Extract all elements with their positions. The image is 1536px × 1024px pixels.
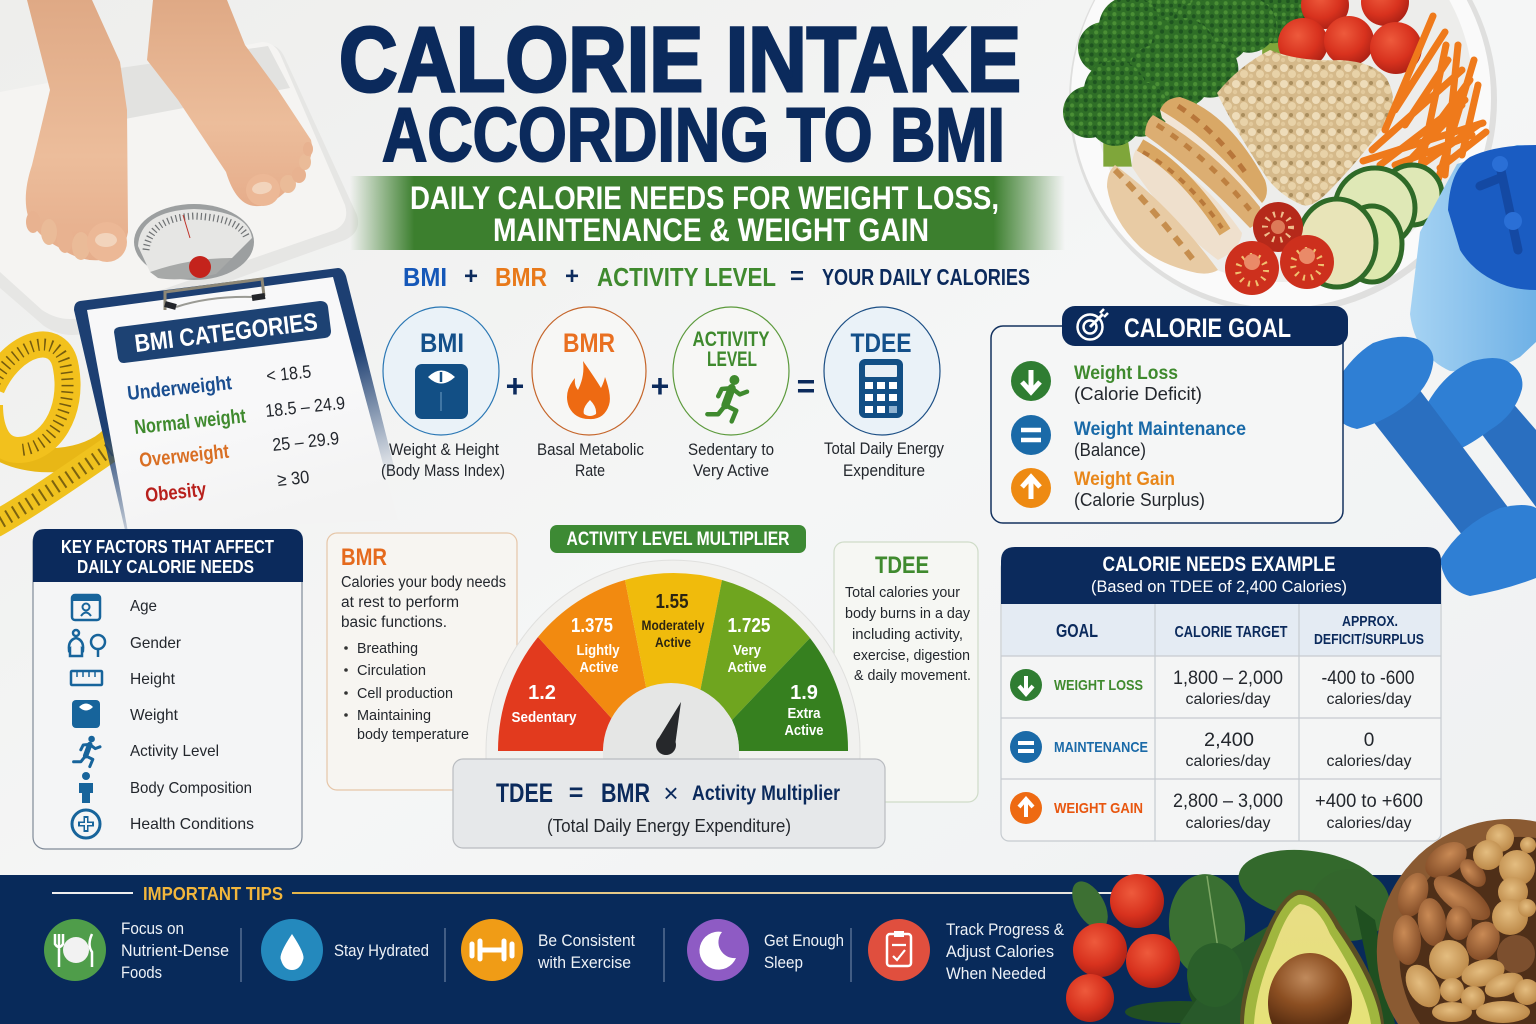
table: calorie needs example	[1001, 547, 1441, 841]
front dumbbell	[1327, 337, 1536, 596]
segment: lightly active: Active	[580, 659, 618, 676]
icon: calculator	[859, 359, 903, 418]
heading: KEY FACTORS THAT AFFECT	[61, 537, 274, 557]
segment: very active: Active	[728, 659, 766, 676]
row: weight gain: WEIGHT GAIN	[1054, 800, 1143, 817]
segment: moderately active: 1.55	[656, 591, 688, 613]
goal: weight loss: (Calorie Deficit)	[1074, 383, 1202, 404]
segment: lightly active: Lightly	[576, 642, 620, 659]
BMI rows: Normal weight	[133, 405, 247, 439]
goal: gain: (Calorie Surplus)	[1074, 489, 1205, 510]
left foot	[26, 0, 128, 262]
spinach leaves	[1065, 841, 1395, 1024]
segment: extra active: Active	[784, 722, 824, 739]
scale dial	[134, 204, 254, 280]
title: ACCORDING TO BMI	[382, 93, 1005, 178]
circle: BMR	[532, 307, 646, 435]
nut bowl	[1377, 819, 1536, 1024]
tip: sleep: Sleep	[764, 953, 803, 972]
captions under circles: Expenditure	[843, 462, 925, 480]
tip: hydration: Stay Hydrated	[334, 941, 429, 960]
formula line: YOUR DAILY CALORIES	[822, 264, 1030, 290]
tip: nutrient-dense foods: Nutrient-Dense	[121, 941, 229, 960]
broccoli	[1063, 0, 1322, 167]
goal: maintenance: Weight Maintenance	[1074, 419, 1246, 440]
factor: health conditions: Health Conditions	[130, 816, 254, 833]
panel: TDEE explanation: exercise, digestion	[853, 647, 970, 664]
factor: age	[72, 595, 157, 620]
segment: moderately active: Active	[655, 634, 691, 650]
column headers: GOAL	[1056, 621, 1098, 641]
tip: track progress: When Needed	[946, 964, 1046, 983]
panel: TDEE explanation: body burns in a day	[845, 605, 970, 622]
tip: exercise	[461, 919, 635, 981]
factor: weight: Weight	[130, 707, 179, 724]
factor: activity level: Activity Level	[130, 743, 219, 760]
plus sign: +	[651, 368, 669, 404]
title	[339, 9, 1021, 178]
rear dumbbell	[1427, 358, 1536, 507]
circle: BMR: BMR	[563, 328, 615, 358]
formula box: ×	[663, 778, 679, 808]
row: weight loss: calories/day	[1326, 691, 1412, 708]
formula line	[403, 262, 1030, 292]
panel: TDEE explanation: & daily movement.	[854, 667, 971, 684]
heading text: BMI CATEGORIES	[133, 308, 319, 358]
row: maintenance: calories/day	[1326, 753, 1412, 770]
photo: tomatoes spinach avocado	[1065, 819, 1536, 1024]
segment: moderately active: Moderately	[642, 617, 705, 633]
captions under circles: Very Active	[693, 462, 769, 480]
photo: yellow measuring tape	[0, 345, 112, 525]
title: CALORIE INTAKE	[339, 9, 1021, 111]
bullet list: body temperature	[357, 726, 469, 743]
subtitle banner: DAILY CALORIE NEEDS FOR WEIGHT LOSS,	[410, 180, 999, 216]
formula line: =	[790, 263, 804, 290]
formula box	[453, 759, 885, 848]
segment: moderately active	[625, 573, 722, 692]
BMI rows: Obesity	[144, 479, 208, 507]
segment: lightly active	[538, 580, 647, 720]
table heading	[1001, 547, 1441, 604]
segment: sedentary: 1.2	[528, 682, 556, 704]
icon: scale	[415, 364, 468, 419]
column headers: CALORIE TARGET	[1174, 624, 1288, 641]
captions under circles: Basal Metabolic	[537, 441, 644, 459]
table heading: (Based on TDEE of 2,400 Calories)	[1091, 577, 1347, 596]
subtitle banner: MAINTENANCE & WEIGHT GAIN	[493, 212, 929, 248]
tomatoes	[1066, 874, 1180, 1022]
captions under circles: Rate	[575, 462, 605, 480]
gauge needle	[656, 702, 681, 755]
photo: food bowl	[1063, 0, 1497, 314]
goal: gain: Weight Gain	[1074, 469, 1175, 490]
tip: sleep: Get Enough	[764, 931, 844, 950]
tip: exercise: with Exercise	[537, 953, 631, 972]
formula box: Activity Multiplier	[692, 781, 841, 805]
segment: very active	[700, 580, 810, 720]
row: weight loss: -400 to -600	[1322, 668, 1414, 689]
factor: gender	[69, 630, 182, 657]
circle: BMI: BMI	[420, 328, 464, 358]
captions under circles: Sedentary to	[688, 441, 774, 459]
formula box: TDEE	[496, 778, 553, 808]
halved cherry tomatoes	[1225, 202, 1334, 295]
formula box: BMR	[601, 778, 650, 808]
equals sign: =	[797, 368, 815, 404]
row: weight gain: calories/day	[1186, 815, 1270, 832]
circle: activity level: LEVEL	[707, 348, 757, 371]
clipboard metal clip	[165, 279, 265, 310]
circle: BMI	[383, 307, 499, 435]
column headers	[1002, 604, 1440, 656]
panel: TDEE explanation: TDEE	[875, 552, 929, 579]
quinoa	[1217, 50, 1393, 206]
goal: weight loss: Weight Loss	[1074, 363, 1178, 384]
tips heading: IMPORTANT TIPS	[143, 884, 283, 904]
bullet list: Cell production	[357, 685, 453, 702]
segment: lightly active: 1.375	[571, 615, 613, 637]
carrot strips	[1363, 16, 1486, 190]
gauge: activity level multiplier	[486, 525, 860, 770]
table heading: CALORIE NEEDS EXAMPLE	[1102, 553, 1336, 576]
formula line: +	[565, 263, 579, 290]
segment: extra active: Extra	[788, 705, 821, 722]
formula line: BMI	[403, 262, 447, 292]
tip: track progress: Track Progress &	[946, 920, 1065, 939]
goal: maintenance	[1011, 415, 1246, 460]
bullet list	[344, 640, 469, 743]
BMI rows: Underweight	[126, 372, 233, 405]
row: maintenance: calories/day	[1186, 753, 1270, 770]
column headers: APPROX.	[1342, 613, 1398, 630]
BMI rows	[126, 361, 346, 507]
panel: BMR explanation	[327, 533, 517, 790]
avocado	[1240, 890, 1384, 1024]
captions under circles	[381, 440, 945, 480]
factor: gender: Gender	[130, 635, 182, 652]
panel: BMR explanation: Calories your body needs	[341, 574, 506, 591]
segment: very active: 1.725	[728, 615, 770, 637]
goal: gain	[1011, 468, 1205, 510]
icon: runner	[707, 375, 747, 421]
factor: body composition	[79, 772, 252, 803]
captions under circles: Total Daily Energy	[824, 440, 945, 458]
formula line: BMR	[495, 262, 547, 292]
tip: sleep	[687, 919, 844, 981]
tip: track progress	[868, 919, 1065, 983]
tip: nutrient-dense foods: Focus on	[121, 919, 184, 938]
BMI rows: 18.5 – 24.9	[264, 393, 346, 421]
bullet list: Breathing	[357, 640, 418, 657]
heading bar	[114, 301, 331, 363]
heading: DAILY CALORIE NEEDS	[77, 557, 254, 577]
row: weight loss: WEIGHT LOSS	[1054, 677, 1143, 694]
segment: extra active	[732, 638, 848, 751]
BMI rows: < 18.5	[265, 361, 312, 386]
panel: TDEE explanation	[834, 542, 978, 802]
factor: health conditions	[72, 810, 254, 838]
gauge hub	[603, 683, 739, 762]
bullet list: Circulation	[357, 662, 426, 679]
right foot	[147, 0, 313, 206]
panel: TDEE explanation: including activity,	[852, 626, 963, 643]
captions under circles: Weight & Height	[389, 441, 499, 459]
goal: weight loss	[1011, 361, 1202, 404]
avocado pit	[1268, 953, 1352, 1024]
row: weight gain: 2,800 – 3,000	[1173, 791, 1283, 812]
circle: TDEE	[824, 307, 940, 435]
formula line: ACTIVITY LEVEL	[597, 262, 776, 292]
gauge heading: ACTIVITY LEVEL MULTIPLIER	[566, 529, 790, 550]
subtitle banner	[350, 176, 1065, 250]
tip: nutrient-dense foods: Foods	[121, 963, 162, 982]
panel: TDEE explanation: Total calories your	[845, 584, 960, 601]
gauge heading	[550, 525, 806, 553]
goal: maintenance: (Balance)	[1074, 439, 1146, 460]
tip: track progress: Adjust Calories	[946, 942, 1054, 961]
segment: sedentary	[498, 637, 613, 751]
tip: hydration	[261, 919, 429, 981]
row: maintenance	[1010, 730, 1412, 770]
factor: body composition: Body Composition	[130, 780, 252, 797]
panel: BMR explanation: BMR	[341, 544, 387, 571]
factor: weight	[72, 700, 179, 728]
tomatoes	[1278, 0, 1422, 74]
segment: sedentary: Sedentary	[512, 709, 577, 726]
row: weight gain: +400 to +600	[1315, 791, 1423, 812]
formula box: =	[569, 779, 583, 807]
icon: target	[1078, 309, 1108, 340]
circle: activity level: ACTIVITY	[692, 328, 770, 351]
circle: TDEE: TDEE	[850, 328, 912, 358]
formula box: (Total Daily Energy Expenditure)	[547, 816, 791, 836]
row: weight loss	[1010, 668, 1414, 708]
formula line: +	[464, 263, 478, 290]
segment: very active: Very	[733, 642, 762, 659]
factor: height: Height	[130, 671, 176, 688]
photo: feet on bathroom scale	[0, 0, 358, 335]
photo: blue water bottle	[1410, 145, 1536, 372]
gauge outer ring	[486, 560, 860, 770]
segment: extra active: 1.9	[790, 682, 818, 704]
row: maintenance: MAINTENANCE	[1054, 739, 1148, 756]
panel: calorie goal	[991, 306, 1348, 523]
BMI rows: ≥ 30	[276, 467, 310, 490]
captions under circles: (Body Mass Index)	[381, 462, 505, 480]
clipboard: BMI categories	[74, 268, 405, 532]
bullet list: Maintaining	[357, 707, 431, 724]
row: maintenance: 2,400	[1204, 730, 1254, 751]
BMI rows: Overweight	[138, 441, 230, 472]
row: weight gain: calories/day	[1326, 815, 1412, 832]
BMI rows: 25 – 29.9	[271, 428, 340, 455]
icon: flame	[567, 361, 610, 419]
panel: BMR explanation: at rest to perform	[341, 594, 459, 611]
row: weight gain	[1010, 791, 1423, 832]
heading bar	[1062, 306, 1348, 346]
almonds	[1392, 835, 1535, 973]
circle: activity level	[673, 307, 789, 435]
cucumber slices	[1298, 165, 1442, 287]
tip: exercise: Be Consistent	[538, 931, 635, 950]
factor: height	[71, 671, 176, 688]
factor: age: Age	[130, 598, 157, 615]
heading	[33, 529, 303, 582]
row: weight loss: 1,800 – 2,000	[1173, 668, 1283, 689]
plus sign: +	[506, 368, 524, 404]
footer band: important tips	[0, 875, 1536, 1024]
column headers: DEFICIT/SURPLUS	[1314, 631, 1424, 648]
factor: activity level	[74, 736, 219, 767]
tip: nutrient-dense foods	[44, 919, 229, 982]
panel: key factors	[33, 529, 303, 849]
row: weight loss: calories/day	[1186, 691, 1270, 708]
heading text: CALORIE GOAL	[1124, 313, 1291, 343]
row: maintenance: 0	[1364, 730, 1374, 751]
panel: BMR explanation: basic functions.	[341, 614, 447, 631]
grilled chicken slices	[1107, 97, 1267, 274]
photo: blue dumbbells	[1327, 337, 1536, 596]
pale nuts and walnuts	[1399, 824, 1536, 1023]
